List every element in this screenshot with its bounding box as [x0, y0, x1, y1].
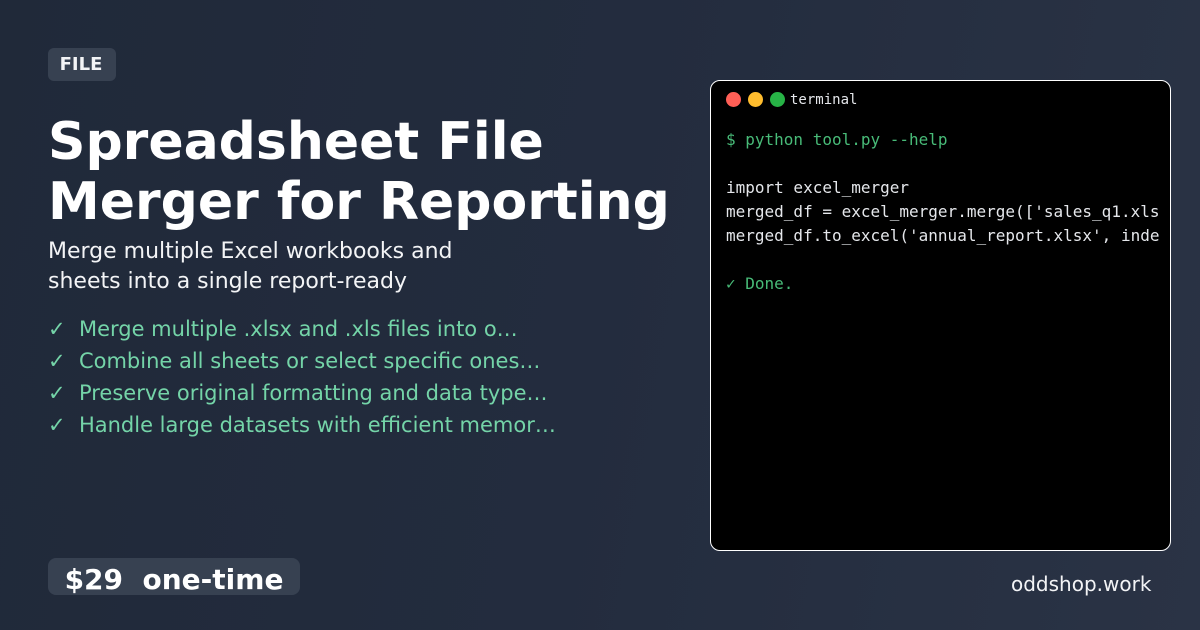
title: Spreadsheet File	[48, 112, 544, 172]
category badge	[48, 48, 116, 81]
feature list: ✓ Merge multiple .xlsx and .xls files into o…	[48, 317, 518, 341]
subtitle: Merge multiple Excel workbooks and	[48, 239, 452, 264]
price badge: $29 one-time	[65, 563, 283, 596]
feature list	[48, 317, 556, 437]
code line 2: merged_df = excel_merger.merge(['sales_q1.xls	[726, 202, 1159, 221]
command line: $ python tool.py --help	[726, 130, 948, 149]
terminal label: terminal	[790, 92, 857, 108]
title	[48, 112, 670, 232]
subtitle: sheets into a single report-ready	[48, 269, 407, 294]
icon: green window dot	[770, 92, 785, 107]
done message: ✓ Done.	[726, 274, 793, 293]
code line 1: import excel_merger	[726, 178, 909, 197]
icon: yellow window dot	[748, 92, 763, 107]
title: Merger for Reporting	[48, 172, 670, 232]
panel: terminal	[710, 80, 1171, 551]
code line 3: merged_df.to_excel('annual_report.xlsx', inde	[726, 226, 1159, 245]
subtitle	[48, 239, 452, 294]
feature list: ✓ Combine all sheets or select specific ones…	[48, 349, 540, 373]
category badge: FILE	[60, 54, 102, 75]
feature list: ✓ Preserve original formatting and data type…	[48, 381, 548, 405]
feature list: ✓ Handle large datasets with efficient memor…	[48, 413, 556, 437]
icon: red window dot	[726, 92, 741, 107]
brand: oddshop.work	[1011, 572, 1151, 596]
